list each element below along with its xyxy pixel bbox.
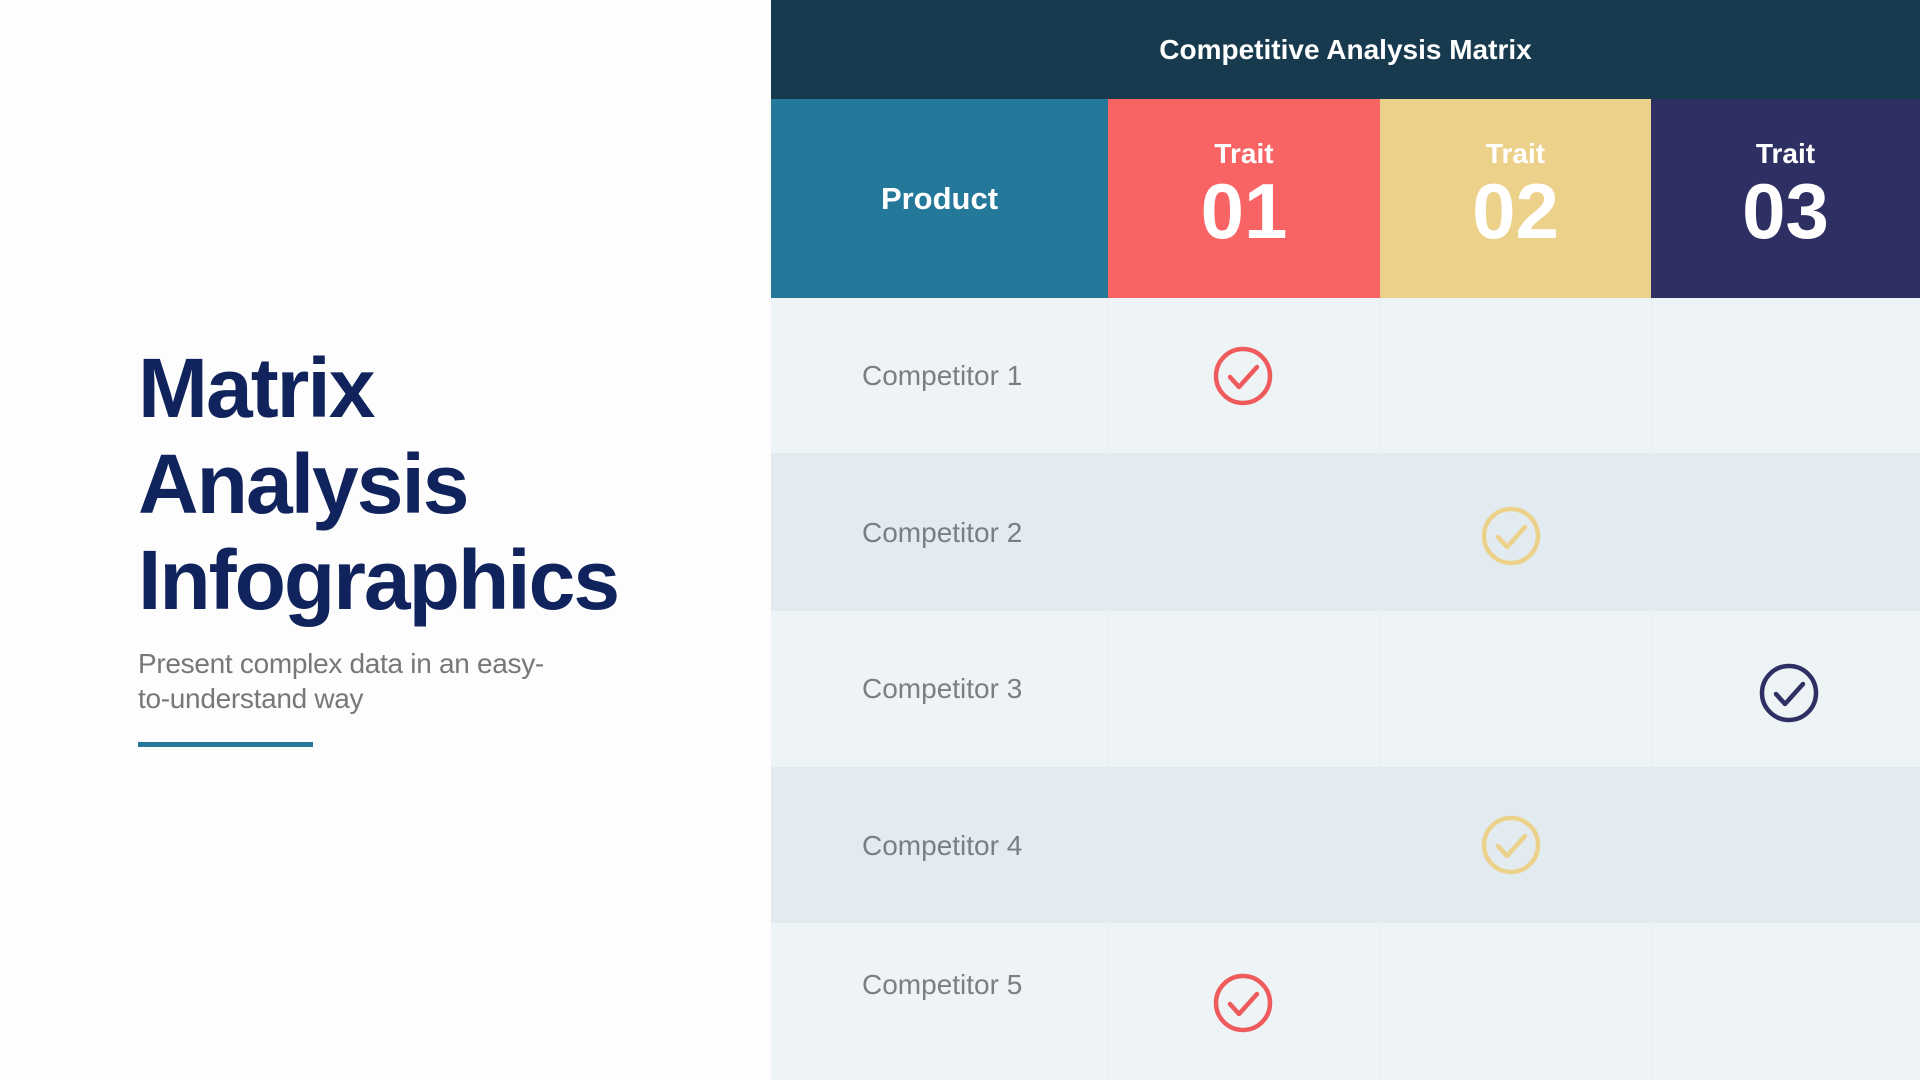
row label: competitor 1: Competitor 1 [862, 360, 1022, 391]
header: trait 03: 03 [1742, 167, 1829, 255]
row label: competitor 3: Competitor 3 [862, 673, 1022, 704]
underline accent [138, 742, 313, 747]
icon: check navy row3 [1762, 666, 1816, 720]
header: trait 03 [1651, 92, 1920, 298]
title [138, 341, 618, 627]
subtitle: Present complex data in an easy- [138, 648, 544, 679]
icon: check red row1 [1216, 349, 1270, 403]
subtitle [138, 648, 544, 714]
row label: competitor 4: Competitor 4 [862, 830, 1022, 861]
panel: matrix table [771, 0, 1920, 298]
title: Analysis [138, 437, 468, 531]
subtitle: to-understand way [138, 683, 363, 714]
icon: check yellow row2 [1484, 509, 1538, 563]
header: trait 01: Trait [1214, 138, 1274, 169]
header: trait 01 [1108, 92, 1380, 298]
row label: competitor 5: Competitor 5 [862, 969, 1022, 1000]
header: trait 01: 01 [1201, 167, 1287, 255]
header: trait 02: 02 [1472, 167, 1559, 255]
title: Matrix [138, 341, 373, 435]
header bar [771, 0, 1920, 99]
row label: competitor 2: Competitor 2 [862, 517, 1022, 548]
header bar: Competitive Analysis Matrix [1159, 34, 1532, 64]
header: trait 02: Trait [1486, 138, 1545, 169]
title: Infographics [138, 533, 618, 627]
header: product: Product [881, 180, 998, 216]
icon: check yellow row4 [1484, 818, 1538, 872]
icon: check red row5 [1216, 976, 1270, 1030]
header: trait 03: Trait [1756, 138, 1815, 169]
header: trait 02 [1380, 92, 1651, 298]
header: product [771, 99, 1108, 298]
